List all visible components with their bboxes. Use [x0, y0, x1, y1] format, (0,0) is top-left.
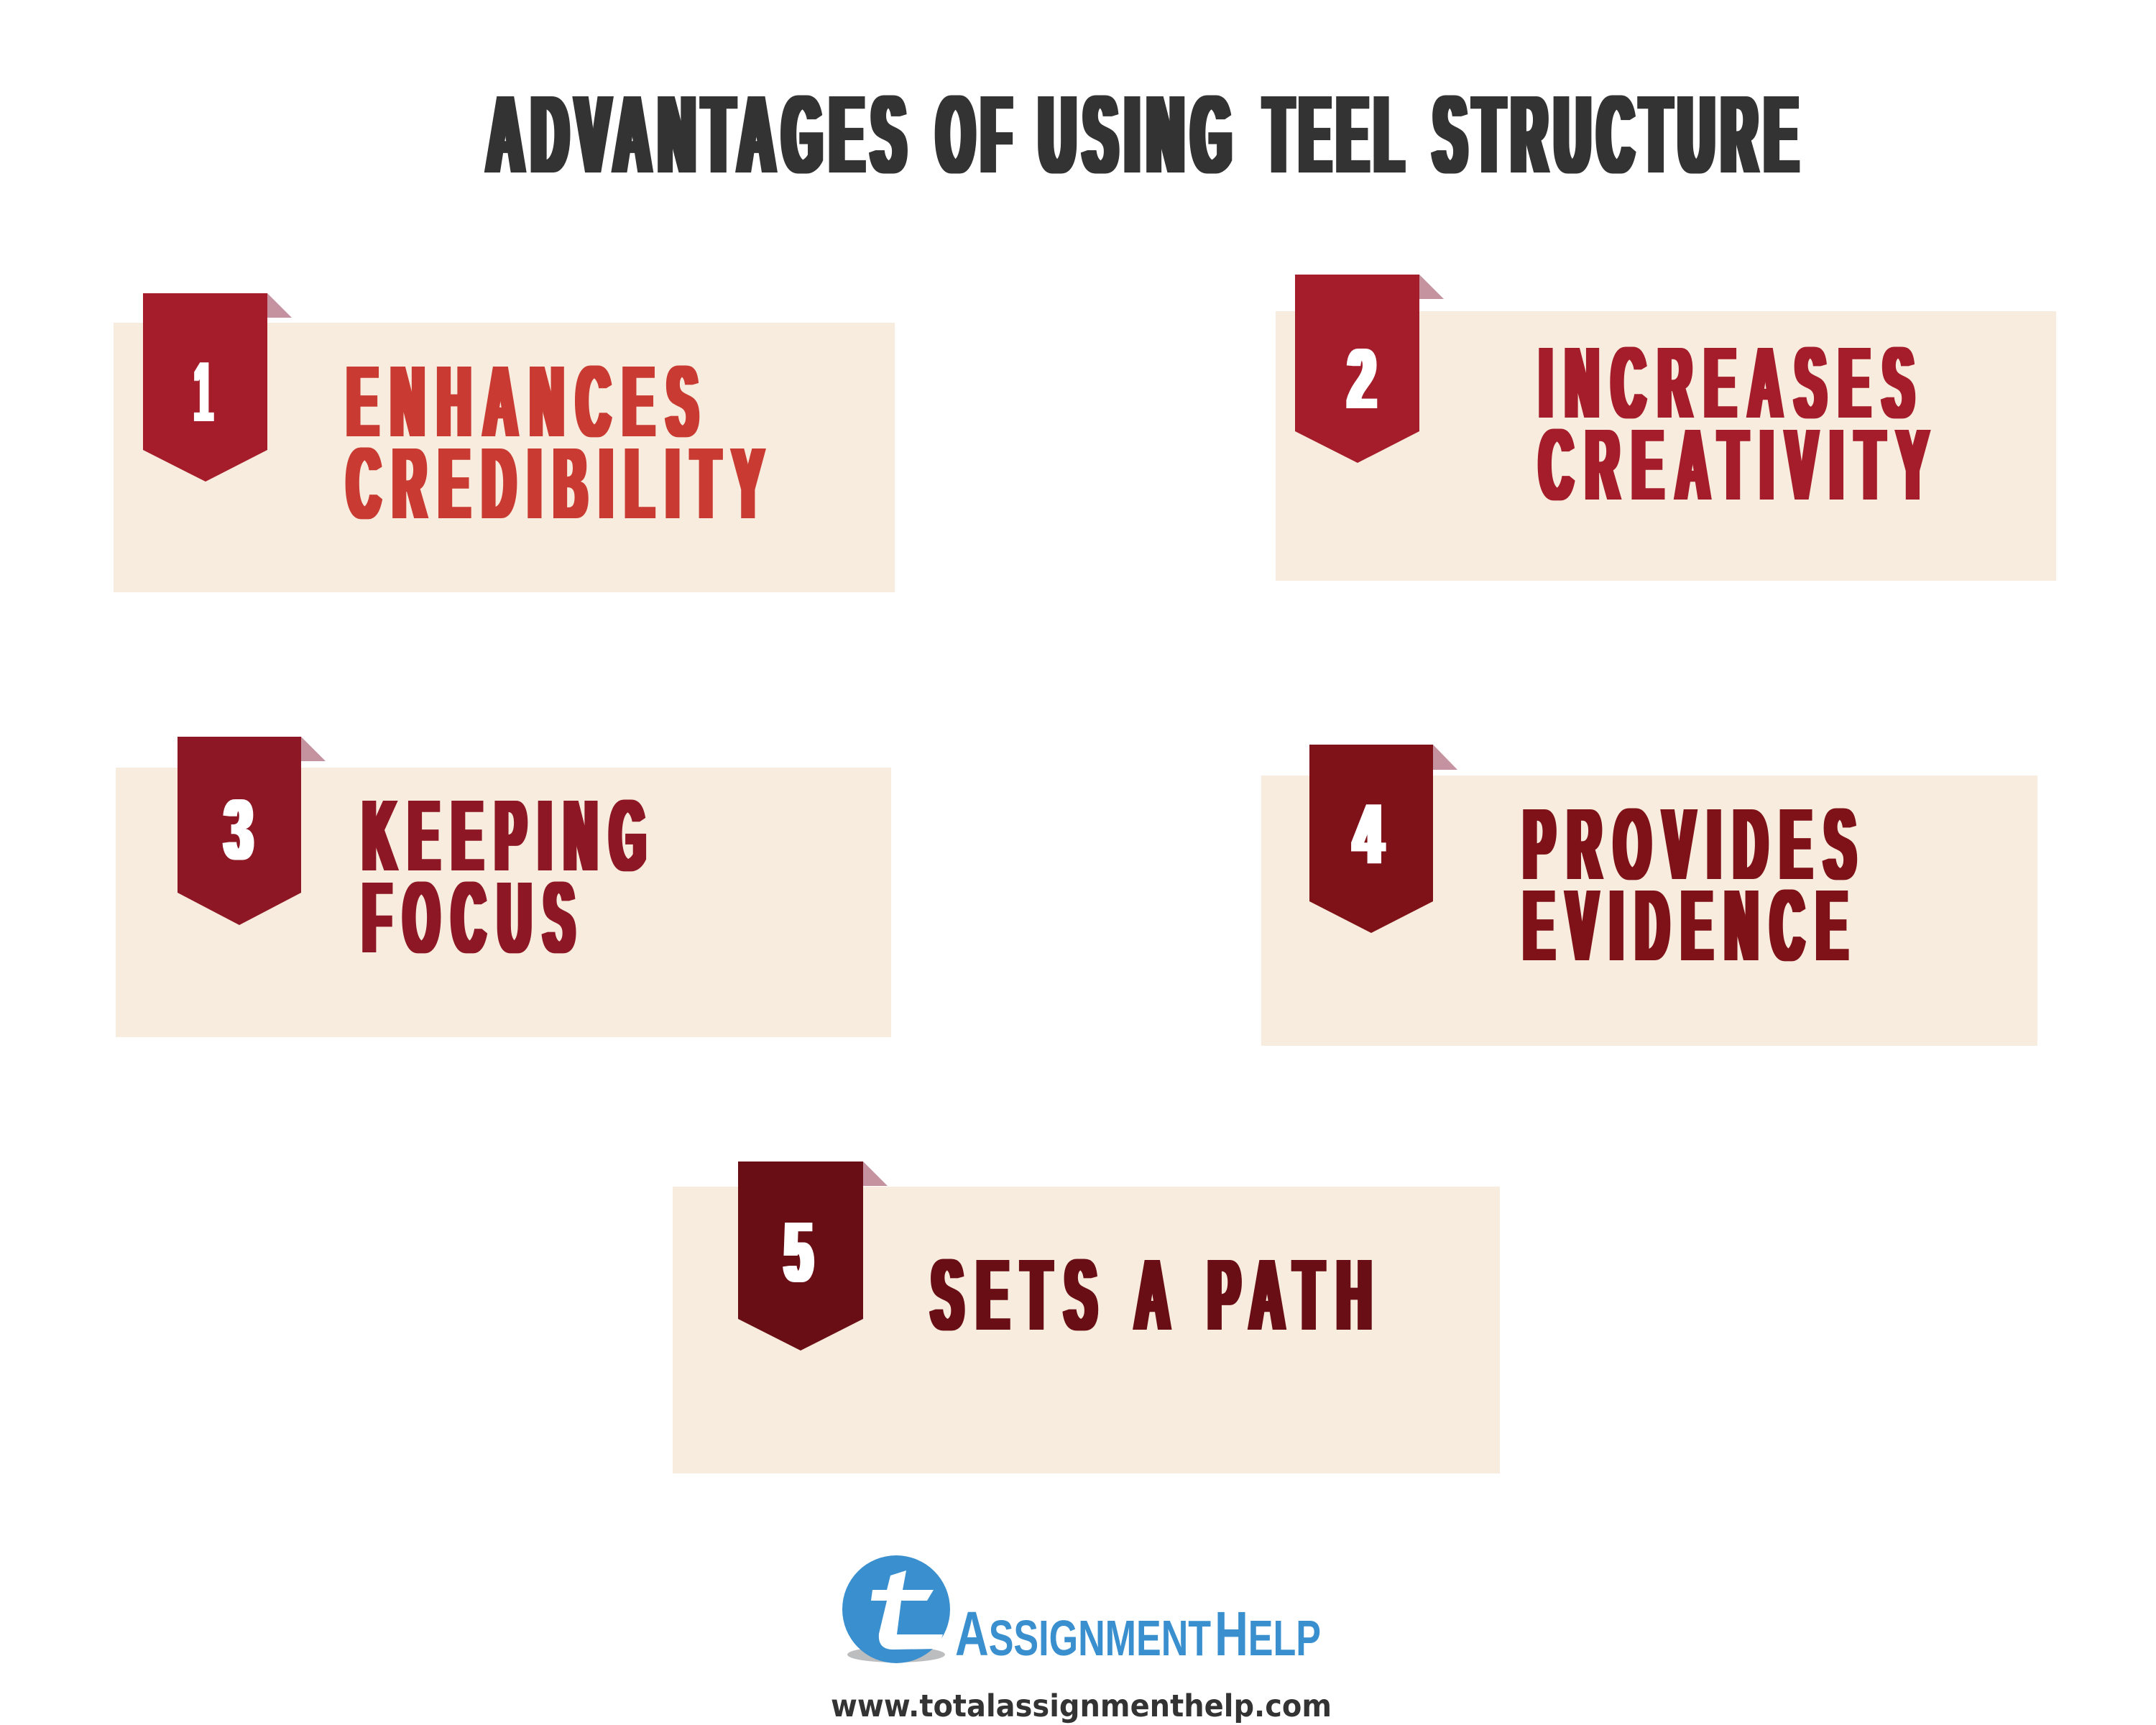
ribbon badge [143, 293, 267, 482]
logo: Assignment Help [842, 1555, 1321, 1669]
ribbon badge [178, 737, 301, 925]
card background [1261, 776, 2037, 1046]
heading [1524, 787, 1869, 982]
number 4: 4 [1354, 786, 1383, 882]
number 5: 5 [785, 1205, 812, 1300]
heading [363, 778, 658, 974]
panel: sets a path [673, 1162, 1500, 1473]
panel: enhances credibility: CREDIBILITY [347, 426, 776, 540]
panel: sets a path: SETS A PATH [931, 1238, 1385, 1351]
ribbon fold [1419, 275, 1444, 299]
card background [673, 1187, 1500, 1473]
ribbon badge [738, 1162, 863, 1351]
heading [1539, 326, 1941, 521]
panel: enhances credibility [114, 293, 895, 592]
ribbon badge [1295, 275, 1419, 463]
ribbon fold [1433, 745, 1457, 770]
logo letter t [871, 1570, 943, 1650]
title: ADVANTAGES [487, 73, 913, 196]
title: USING [1039, 73, 1239, 196]
panel: enhances credibility: 1 [194, 344, 213, 440]
card background [116, 768, 891, 1037]
panel: increases creativity [1276, 275, 2056, 581]
ribbon badge [1309, 745, 1433, 933]
panel: keeping focus: KEEPING [363, 778, 658, 892]
website url: www.totalassignmenthelp.com [831, 1688, 1332, 1724]
heading: FOCUS [363, 860, 587, 974]
title: TEEL [1265, 73, 1410, 196]
panel: keeping focus [116, 737, 891, 1037]
heading: ENHANCES [347, 344, 711, 458]
logo shadow [847, 1647, 945, 1662]
card background [114, 323, 895, 592]
ribbon fold [267, 293, 292, 318]
logo wordmark: ASSIGNMENT HELP [955, 1599, 1321, 1669]
number 2: 2 [1348, 331, 1376, 427]
card background [1276, 311, 2056, 581]
heading [347, 344, 776, 540]
title: OF [937, 73, 1018, 196]
panel: provides evidence [1261, 745, 2037, 1046]
number 3: 3 [225, 782, 252, 878]
ribbon fold [863, 1162, 888, 1186]
ribbon fold [301, 737, 326, 761]
logo circle [842, 1555, 950, 1663]
